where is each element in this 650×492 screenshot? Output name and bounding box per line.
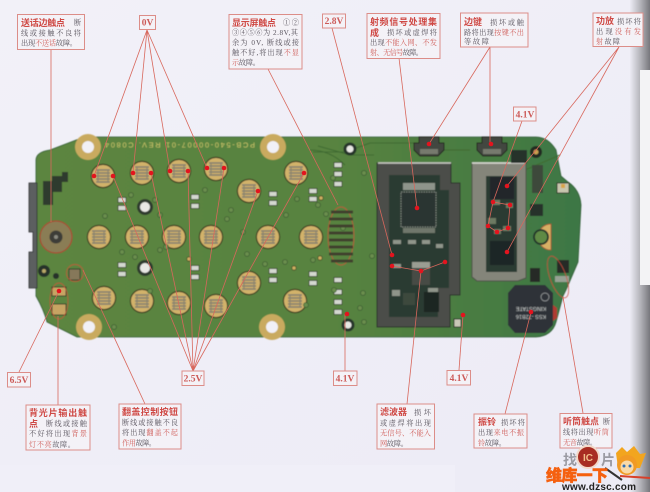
callout: flip control button: 作用故障。 (122, 438, 156, 448)
red probe dots (57, 142, 533, 317)
label: 4.1V bottom left (334, 371, 357, 386)
small ellipse near earpiece (543, 254, 573, 300)
label: 6.5V: 6.5V (10, 376, 28, 386)
callout: power amp: 损坏将 (617, 17, 641, 26)
callout: power amp (593, 13, 643, 46)
leader lines (19, 28, 619, 414)
callout: RF IC (367, 14, 440, 58)
watermark (546, 446, 650, 492)
callout: earpiece contacts: 断 (603, 417, 610, 426)
callout: mic contact (18, 14, 84, 50)
label: 2.8V (322, 14, 346, 28)
callout: side keys: 损坏或触 (490, 18, 525, 27)
callout: display contacts (229, 14, 302, 69)
side connector (29, 183, 37, 288)
callout: filter: 滤波器 (380, 406, 407, 417)
callout: power amp: 出现 没有发 (596, 27, 641, 36)
label: 4.1V top (514, 107, 536, 121)
callout: filter: 或虚焊将出现 (380, 418, 431, 428)
callout: filter: 网故障。 (380, 439, 408, 448)
label: 4.1V bottom right: 4.1V (450, 374, 468, 384)
label: 2.5V (182, 371, 204, 386)
callout: power amp: 射故障 (596, 37, 620, 46)
circuit board (29, 134, 581, 340)
label: 4.1V bottom left: 4.1V (336, 374, 354, 384)
callout: flip control button (119, 404, 181, 449)
callout: RF IC: 出现不能入网、不发 (370, 38, 437, 47)
buzzer: KSS -72B16 (516, 313, 546, 319)
label: 0V (140, 16, 156, 30)
callout: mic contact: 断 (74, 18, 81, 27)
board outline (36, 137, 581, 337)
label: 4.1V top: 4.1V (516, 110, 534, 120)
board label: PCB-540-00007-01 REV. C0804 (105, 140, 255, 150)
upper left components (43, 172, 68, 205)
capacitor (454, 319, 461, 327)
callout: backlight contacts: 不好将出现背景 (29, 429, 87, 438)
watermark: brand text: 维库一下 (546, 466, 608, 485)
label: 4.1V bottom right (447, 370, 470, 385)
callout: earpiece contacts: 线将出现听筒 (563, 428, 609, 436)
RF small chips (490, 177, 514, 199)
watermark: find chip badge: 找 (563, 452, 577, 468)
label: 0V: 0V (142, 18, 153, 28)
callout: backlight contacts: 点 (29, 418, 38, 429)
power amp parts (511, 146, 543, 216)
callout: backlight contacts: 灯不亮故障。 (29, 440, 75, 449)
callout: power amp: 功放 (596, 15, 614, 26)
label: 2.5V: 2.5V (184, 374, 202, 384)
callout: display contacts: 触不好,将出现不显 (232, 48, 299, 57)
callout: ringer: 损坏将 (501, 418, 525, 427)
callout: backlight contacts (26, 405, 90, 450)
dark via holes (138, 144, 355, 330)
mounting holes (75, 134, 286, 340)
label: 2.8V: 2.8V (325, 17, 344, 27)
callout: earpiece contacts (560, 414, 612, 448)
callout: display contacts: 示故障。 (232, 58, 260, 67)
callout: side keys: 等故障 (464, 37, 489, 46)
callout: RF IC: 射、无信号故障。 (370, 48, 423, 57)
callout: backlight contacts: 背光片输出触 (29, 407, 87, 418)
RF processor chip (401, 192, 436, 227)
left shield can (377, 163, 460, 327)
callout: side keys (460, 13, 528, 47)
callout: ringer (474, 414, 527, 448)
callout: mic contact: 出现不送话故障。 (21, 38, 77, 48)
right shield can (472, 163, 526, 281)
callout: side keys: 边键 (464, 16, 482, 27)
gold coil (534, 224, 551, 250)
callout: side keys: 路将出现按键不出 (464, 28, 524, 37)
buzzer (508, 285, 557, 333)
callout: display contacts: ①② (283, 18, 299, 27)
watermark: find chip badge: 片 (601, 452, 615, 468)
callout: filter: 无信号、不能入 (380, 428, 432, 438)
callout: flip control button: 将出现翻盖不起 (122, 428, 178, 437)
callout: ringer: 振铃 (478, 416, 496, 427)
callout: display contacts: 显示屏触点 (232, 17, 276, 28)
callout: RF IC: 成 (370, 27, 379, 38)
small components (103, 162, 374, 329)
callout: RF IC: 损坏或虚焊将 (387, 28, 437, 37)
callout: ringer: 出现来电不振 (478, 428, 525, 437)
microphone pad (40, 221, 72, 253)
watermark: find chip badge (563, 446, 615, 468)
callout: backlight contacts: 断线或接触 (46, 419, 88, 428)
callout: earpiece contacts: 听筒触点 (563, 416, 599, 426)
display connector (328, 207, 354, 265)
watermark: find chip badge: IC (583, 453, 593, 464)
callout: flip control button: 翻盖控制按钮 (122, 406, 178, 417)
LED (557, 183, 569, 193)
label: 6.5V (8, 372, 30, 387)
lower left parts (38, 264, 84, 319)
callout: display contacts: 余为 0V, 断线或接 (232, 38, 300, 47)
keypad contacts (87, 157, 323, 318)
callout: ringer: 铃故障。 (478, 438, 506, 448)
buzzer: KINGSTATE (515, 305, 546, 311)
watermark: mascot (605, 446, 650, 480)
lower right components (530, 260, 569, 282)
callout: RF IC: 射频信号处理集 (370, 16, 437, 27)
callout: filter: 损坏 (414, 408, 432, 417)
callout: display contacts: ③④⑤⑥为 2.8V,其 (232, 28, 299, 37)
callout: flip control button: 断线或接触不良 (122, 418, 178, 427)
callout: mic contact: 送话边触点 (21, 17, 65, 28)
callout: mic contact: 线或接触不良将 (21, 28, 81, 38)
side keys (414, 137, 507, 156)
traces (310, 143, 560, 170)
callout: filter (377, 404, 434, 449)
callout: earpiece contacts: 无音故障。 (563, 438, 597, 447)
